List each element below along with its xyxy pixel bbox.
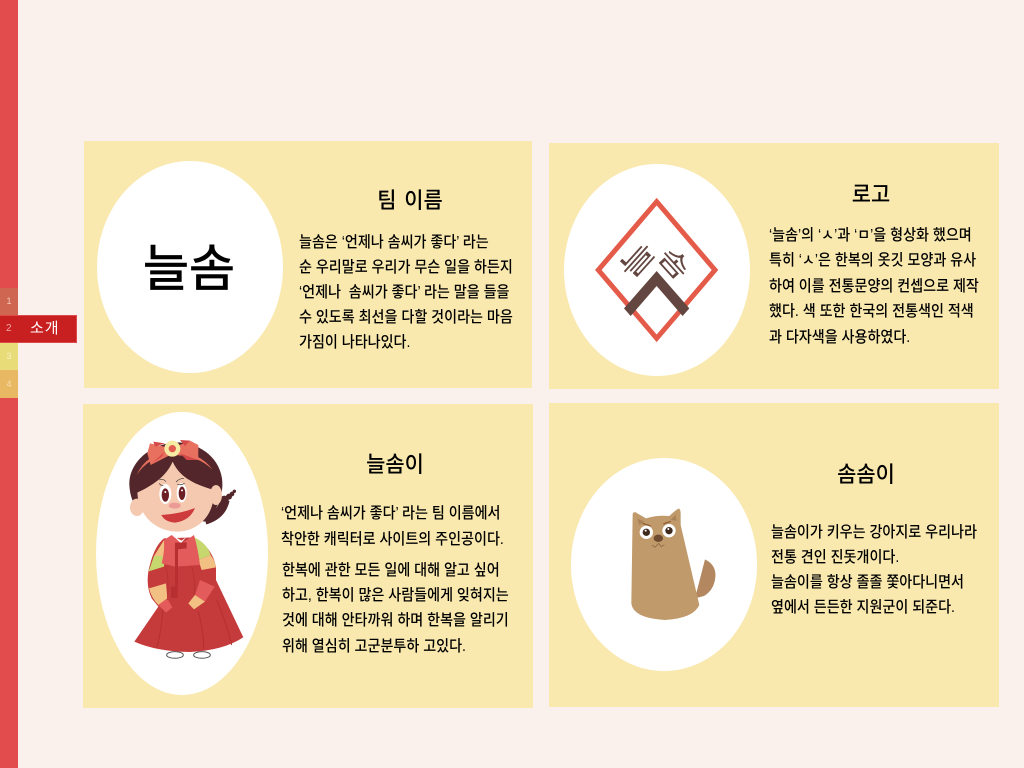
text block: logo: 했다. 색 또한 한국의 전통색인 적색 — [769, 303, 974, 320]
text block: character description: 위해 열심히 고군분투하 고있다. — [282, 638, 466, 655]
text block: logo — [769, 226, 979, 346]
text block: team name: 수 있도록 최선을 다할 것이라는 마음 — [299, 309, 513, 326]
icon: logo diamond: 늘 — [614, 236, 662, 285]
face — [137, 462, 214, 532]
nose and mouth — [169, 503, 181, 509]
heading: 팀 이름: 팀 이름 — [377, 188, 443, 213]
jeogori — [162, 535, 200, 567]
text block: dog description: 전통 견인 진돗개이다. — [771, 549, 899, 566]
text block: character description — [282, 562, 509, 655]
sidebar navigation — [0, 0, 77, 768]
headband and bow — [137, 451, 213, 475]
text block: logo: 과 다자색을 사용하였다. — [769, 329, 910, 346]
text block: logo: ‘늘솜’의 ‘ㅅ’과 ‘ㅁ’을 형상화 했으며 — [769, 227, 972, 244]
text block: character description: 하고, 한복이 많은 사람들에게 잊혀지는 — [282, 587, 509, 604]
eyes — [159, 484, 171, 504]
text block: character intro: ‘언제나 솜씨가 좋다’ 라는 팀 이름에서 — [281, 505, 501, 522]
body — [631, 509, 699, 620]
heading: 늘솜이: 늘솜이 — [366, 452, 424, 477]
nose and mouth — [654, 535, 663, 542]
text block: team name — [299, 234, 513, 351]
ears — [130, 499, 144, 516]
text block: character intro — [281, 505, 504, 548]
text block: team name: 순 우리말로 우리가 무슨 일을 하든지 — [299, 259, 513, 276]
panel: logo — [549, 143, 999, 389]
shoes — [167, 652, 183, 658]
nav item 3 — [0, 343, 18, 370]
tail — [695, 559, 715, 598]
panel: character Neulsom — [83, 404, 533, 708]
panel: team name — [84, 141, 532, 388]
text block: dog description: 옆에서 든든한 지원군이 되준다. — [771, 599, 955, 616]
hair back — [129, 442, 222, 522]
nav item 4: 4 — [6, 379, 12, 389]
eyes — [640, 526, 653, 539]
text block: dog description: 늘솜이를 항상 졸졸 쫓아다니면서 — [771, 574, 964, 591]
text block: team name: 늘솜은 ‘언제나 솜씨가 좋다’ 라는 — [299, 234, 489, 251]
text block: logo: 하여 이를 전통문양의 컨셉으로 제작 — [769, 278, 979, 295]
dress silhouette — [134, 537, 243, 652]
text block: team name: 가짐이 나타나있다. — [299, 334, 410, 351]
text block: character description: 한복에 관한 모든 일에 대해 알고 싶어 — [282, 562, 500, 579]
sleeve stripes — [154, 540, 165, 556]
inner ears — [637, 519, 645, 525]
nav item 4 — [0, 370, 18, 398]
wordmark: 늘솜: 늘솜 — [143, 241, 235, 297]
text block: dog description — [771, 524, 977, 616]
text block: logo: 특히 ‘ㅅ’은 한복의 옷깃 모양과 유사 — [769, 252, 976, 269]
text block: character intro: 착안한 캐릭터로 사이트의 주인공이다. — [281, 531, 504, 548]
text block: dog description: 늘솜이가 키우는 강아지로 우리나라 — [771, 524, 977, 541]
braid — [205, 500, 225, 520]
nav item 2 active: 소개: 소개 — [30, 320, 60, 337]
nav item 1: 1 — [6, 296, 12, 306]
panel: dog Somsom — [549, 403, 999, 707]
nav item 3: 3 — [6, 351, 12, 361]
heading: 솜솜이: 솜솜이 — [837, 462, 895, 487]
text block: team name: ‘언제나 솜씨가 좋다’ 라는 말을 들을 — [299, 284, 509, 301]
nav item 2 active: 소개: 2 — [6, 323, 12, 334]
nav item 1 — [0, 288, 18, 315]
text block: character description: 것에 대해 안타까워 하며 한복을 알리기 — [282, 612, 509, 629]
icon: logo diamond: 솜 — [652, 242, 696, 286]
nav item 2 active: 소개 — [0, 315, 77, 343]
heading: 로고: 로고 — [852, 182, 890, 207]
